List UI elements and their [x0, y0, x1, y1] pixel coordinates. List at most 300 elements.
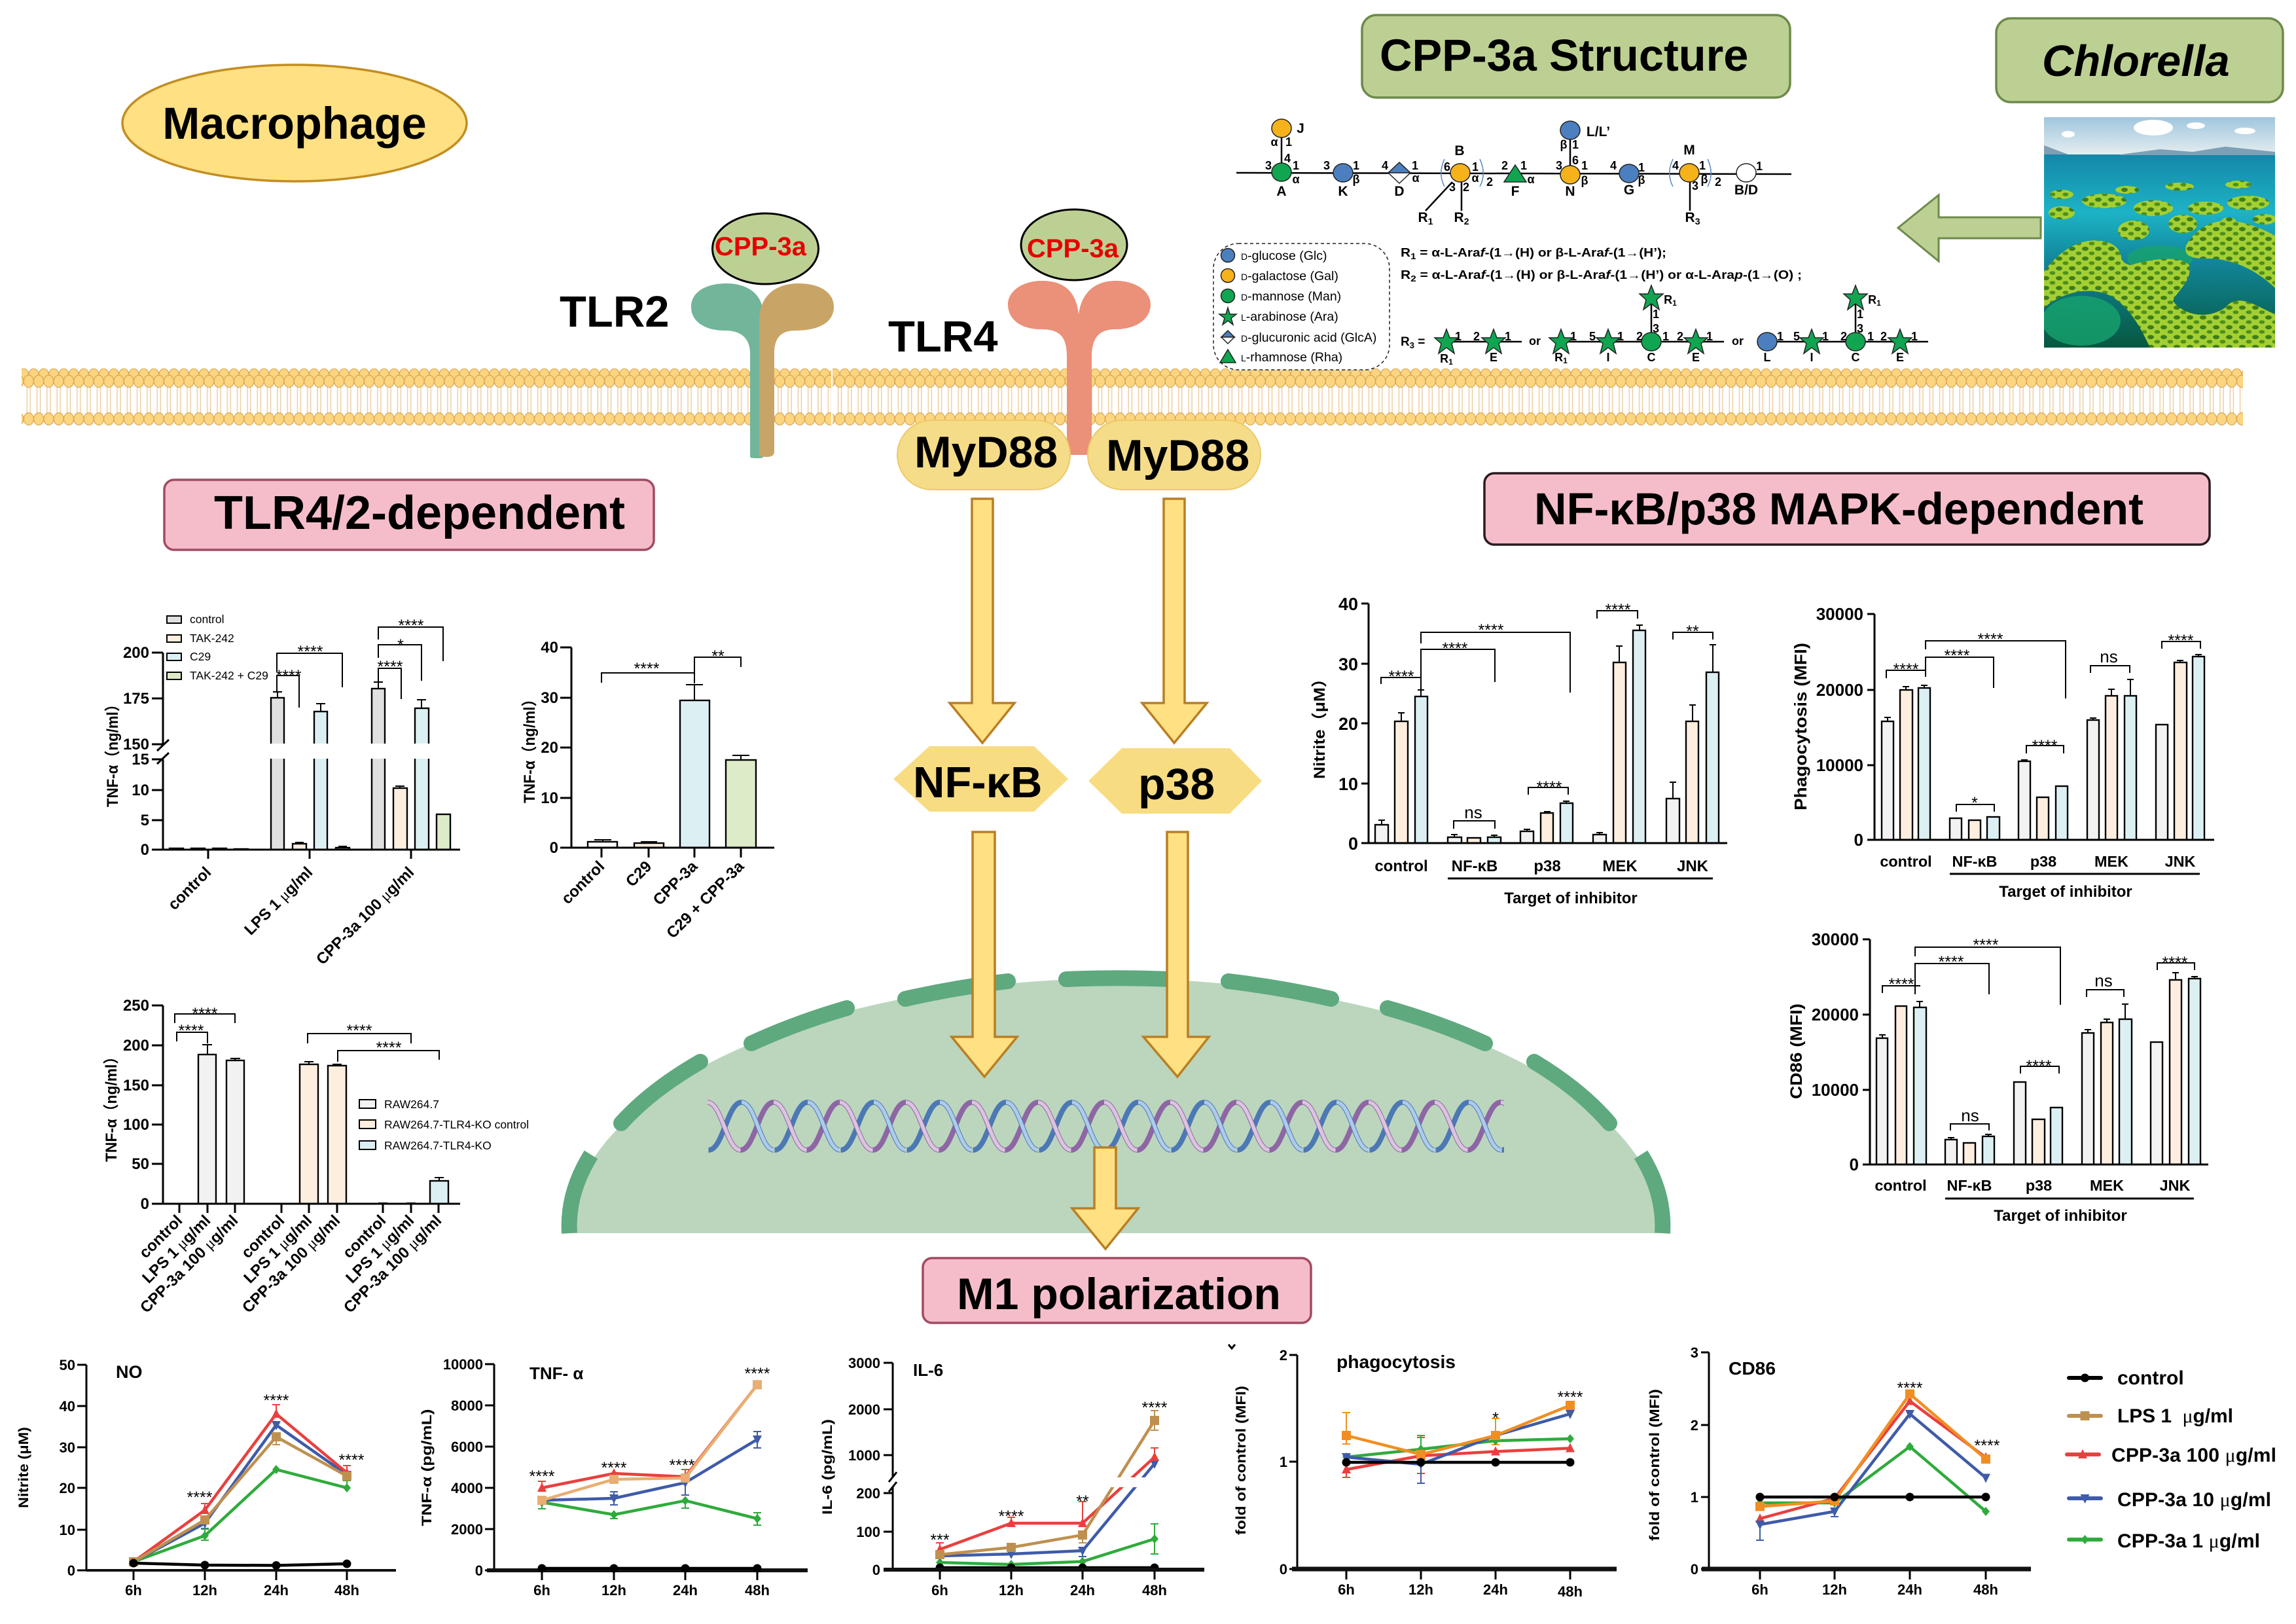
line chart: phagocytosis: [1229, 1344, 1617, 1600]
glycan backbone structure: 4: [1672, 159, 1679, 172]
line chart: IL-6: 100: [856, 1524, 880, 1540]
bar chart: Nitrite inhibitors: [1311, 594, 1727, 907]
bar chart: TLR4 knockout: 100: [123, 1116, 149, 1134]
line chart: NO: 24h: [264, 1582, 289, 1598]
R3 definition chains: R: [1664, 293, 1672, 306]
glycan backbone structure: A: [1276, 184, 1287, 199]
significance brackets: ****: [2032, 737, 2058, 755]
line chart: IL-6: ***: [930, 1531, 950, 1549]
arrow: MyD88 to p38: [1142, 499, 1207, 743]
glycan backbone structure: 3: [1556, 159, 1562, 172]
R3 definition chains: 1: [1653, 308, 1659, 321]
significance brackets: ****: [378, 658, 403, 676]
bar chart: CD86 inhibitors: CD86 (MFI): [1787, 1003, 1806, 1099]
R3 definition chains: E: [1896, 351, 1904, 364]
significance brackets: ****: [1945, 647, 1970, 665]
legend: [167, 613, 268, 682]
line chart: CD86: 0: [1691, 1561, 1698, 1578]
R2 definition: = α-L-Ara: [1416, 268, 1482, 281]
R3 definition chains: 1: [1617, 330, 1624, 343]
bar chart: TNF-a C29: C29: [622, 857, 655, 890]
bar chart: TNF-a with inhibitors: 175: [123, 690, 149, 708]
line chart: IL-6: **: [1076, 1492, 1089, 1511]
line chart: NO: Nitrite (μM): [16, 1427, 31, 1508]
glycan backbone structure: 4: [1382, 159, 1388, 172]
bar chart: TLR4 knockout: 250: [123, 997, 149, 1015]
line chart: NO: ****: [264, 1392, 289, 1410]
legend: TAK-242: [190, 632, 234, 645]
R3 definition chains: 2: [1677, 330, 1683, 343]
line chart: CD86: 48h: [1973, 1581, 1998, 1598]
bar chart: Nitrite inhibitors: Nitrite（μM）: [1311, 670, 1329, 779]
line chart: TNF-a: 12h: [601, 1582, 626, 1598]
MyD88 left: [897, 420, 1070, 490]
bar chart: TNF-a with inhibitors: 15: [132, 751, 149, 768]
legend: monosaccharides: D-glucose (Glc): [1241, 249, 1327, 263]
glycan backbone structure: 1: [1428, 216, 1433, 226]
R3 definition chains: or: [1529, 334, 1541, 348]
R3 definition chains: 2: [1840, 330, 1847, 343]
significance brackets: ****: [634, 660, 660, 678]
glycan backbone structure: 3: [1323, 159, 1330, 172]
significance brackets: ****: [1389, 668, 1414, 686]
significance brackets: ns: [2100, 647, 2118, 666]
p38 hexagon: [1088, 748, 1262, 814]
line chart: phagocytosis: fold of control (MFI): [1234, 1386, 1249, 1535]
bar chart: TNF-a C29: C29 + CPP-3a: [663, 857, 748, 942]
bar chart: TLR4 knockout: 150: [123, 1077, 149, 1094]
bar chart: CD86 inhibitors: 20000: [1812, 1005, 1859, 1024]
glycan backbone structure: [1236, 119, 1791, 226]
bar chart: Phagocytosis inhibitors: Target of inhibitor: [1999, 883, 2132, 901]
line chart: CD86: ****: [1975, 1437, 2000, 1455]
line chart: IL-6: ****: [999, 1507, 1024, 1526]
significance brackets: [1381, 601, 1713, 829]
membrane: [22, 369, 2243, 425]
glycan backbone structure: N: [1565, 184, 1575, 199]
line chart: TNF-a: ****: [745, 1365, 770, 1383]
line chart: NO: 12h: [192, 1582, 217, 1598]
glycan backbone structure: 6: [1572, 154, 1579, 167]
bar chart: TLR4 knockout: 50: [132, 1155, 149, 1173]
line chart: NO: 20: [60, 1480, 75, 1496]
glycan backbone structure: B: [1454, 143, 1465, 158]
legend: time-course series: [2067, 1367, 2276, 1552]
legend: monosaccharides: D-galactose (Gal): [1241, 269, 1338, 283]
NF-kB hexagon: NF-κB: [913, 758, 1042, 807]
glycan backbone structure: 1: [1638, 161, 1645, 174]
line chart: phagocytosis: 6h: [1338, 1581, 1355, 1598]
heading: TLR4/2-dependent: TLR4/2-dependent: [214, 487, 625, 539]
glycan backbone structure: 1: [1572, 138, 1579, 151]
glycan backbone structure: α: [1527, 173, 1535, 186]
R3 definition chains: I: [1606, 351, 1610, 364]
bar chart: Phagocytosis inhibitors: 10000: [1816, 755, 1863, 775]
line chart: NO: NO: [116, 1362, 143, 1382]
bar chart: TNF-a C29: [521, 639, 774, 942]
bar chart: TNF-a C29: 20: [541, 739, 558, 757]
bar chart: TNF-a C29: control: [558, 857, 608, 908]
glycan backbone structure: 2: [1486, 175, 1493, 189]
R2 definition: 2: [1410, 274, 1416, 283]
bars: [170, 689, 450, 850]
significance brackets: ****: [1939, 953, 1964, 971]
bar chart: TNF-a with inhibitors: 200: [123, 644, 149, 662]
bar chart: Phagocytosis inhibitors: MEK: [2094, 853, 2128, 870]
bar chart: TLR4 knockout: [103, 997, 529, 1316]
glycan backbone structure: R: [1418, 210, 1428, 225]
R3 definition chains: [1401, 285, 1928, 367]
significance brackets: ****: [376, 1039, 402, 1057]
line chart: TNF-a: TNF-α (pg/mL): [420, 1409, 435, 1526]
bar chart: TLR4 knockout: control: [238, 1212, 288, 1262]
glycan backbone structure: 4: [1284, 152, 1291, 165]
DNA helix: [708, 1100, 1504, 1153]
heading: TLR4/2-dependent: [164, 480, 654, 550]
bar chart: TNF-a C29: 40: [541, 639, 558, 657]
bar chart: TNF-a with inhibitors: 0: [141, 841, 149, 859]
line chart: phagocytosis: 48h: [1558, 1583, 1583, 1600]
significance brackets: [1882, 936, 2195, 1130]
significance brackets: ****: [192, 1005, 218, 1023]
glycan backbone structure: 3: [1692, 179, 1698, 192]
bar chart: Phagocytosis inhibitors: p38: [2030, 853, 2056, 870]
bar chart: TLR4 knockout: CPP-3a 100 μg/ml: [137, 1212, 242, 1316]
significance brackets: [276, 617, 443, 708]
glycan backbone structure: 2: [1463, 181, 1469, 194]
bar chart: Nitrite inhibitors: 30: [1338, 655, 1358, 674]
glycan backbone structure: R: [1685, 210, 1695, 225]
significance brackets: ****: [1893, 660, 1919, 679]
line chart: CD86: 12h: [1822, 1581, 1847, 1598]
bar chart: TLR4 knockout: LPS 1 μg/ml: [139, 1212, 214, 1287]
line chart: phagocytosis: 2: [1280, 1347, 1287, 1363]
line chart: CD86: 1: [1691, 1489, 1698, 1506]
line chart: IL-6: 0: [872, 1562, 880, 1578]
R1 definition: R: [1401, 246, 1409, 259]
R3 definition chains: I: [1810, 351, 1814, 364]
significance brackets: [175, 1005, 439, 1062]
TLR4 label: TLR4: [888, 312, 997, 361]
line chart: CD86: 3: [1691, 1344, 1698, 1361]
significance brackets: ****: [179, 1022, 204, 1040]
glycan backbone structure: 1: [1520, 159, 1527, 172]
glycan backbone structure: β: [1581, 174, 1588, 187]
R3 definition chains: 1: [1822, 330, 1829, 343]
bar chart: TLR4 knockout: TNF-α（ng/ml）: [103, 1049, 120, 1162]
line chart: NO: 10: [60, 1522, 75, 1538]
line chart: IL-6: ****: [1142, 1399, 1168, 1417]
glycan backbone structure: 1: [1756, 160, 1763, 173]
significance brackets: **: [1686, 623, 1699, 641]
bar chart: TLR4 knockout: CPP-3a 100 μg/ml: [239, 1212, 344, 1316]
R3 definition chains: 3: [1857, 322, 1863, 335]
line chart: NO: 30: [60, 1439, 75, 1456]
R3 definition chains: 2: [1473, 330, 1480, 343]
bar chart: Nitrite inhibitors: 40: [1338, 594, 1358, 614]
line chart: IL-6: IL-6 (pg/mL): [820, 1419, 835, 1515]
heading: NF-kB/p38 MAPK-dependent: NF-κB/p38 MAPK-dependent: [1534, 484, 2144, 534]
bar chart: TNF-a with inhibitors: 10: [132, 782, 149, 799]
bar chart: Phagocytosis inhibitors: Phagocytosis (MFI): [1791, 643, 1810, 810]
Macrophage label: [122, 65, 467, 181]
legend: [359, 1098, 529, 1152]
bar chart: TNF-a with inhibitors: 5: [141, 812, 149, 829]
R3 definition chains: C: [1647, 351, 1656, 364]
line chart: TNF-a: 10000: [443, 1356, 483, 1373]
bar chart: TNF-a with inhibitors: 150: [123, 736, 149, 753]
bar chart: CD86 inhibitors: Target of inhibitor: [1994, 1207, 2127, 1225]
line chart: IL-6: IL-6: [913, 1360, 943, 1380]
R3 definition chains: 1: [1563, 356, 1568, 365]
line chart: NO: [16, 1357, 396, 1598]
nucleus: [569, 978, 1662, 1233]
glycan backbone structure: 1: [1699, 159, 1706, 172]
bar chart: CD86 inhibitors: MEK: [2090, 1177, 2124, 1194]
line chart: TNF-a: 4000: [451, 1480, 483, 1496]
line chart: CD86: 2: [1691, 1417, 1698, 1434]
bar chart: CD86 inhibitors: NF-κB: [1947, 1177, 1992, 1194]
line chart: CD86: 24h: [1897, 1581, 1922, 1598]
R3 definition chains: 5: [1589, 330, 1596, 343]
R3 definition chains: 1: [1777, 330, 1784, 343]
receptor: TLR2: [691, 283, 834, 458]
bar chart: CD86 inhibitors: 10000: [1812, 1080, 1859, 1100]
bar chart: CD86 inhibitors: [1787, 929, 2208, 1225]
bar chart: TNF-a C29: 0: [550, 839, 558, 857]
MyD88 right: [1088, 420, 1261, 490]
glycan backbone structure: B/D: [1734, 183, 1758, 198]
significance brackets: ****: [1443, 640, 1468, 658]
significance brackets: ****: [399, 617, 424, 635]
glycan backbone structure: F: [1511, 184, 1520, 199]
line chart: IL-6: 3000: [848, 1355, 880, 1371]
significance brackets: **: [711, 647, 725, 666]
glycan backbone structure: β: [1352, 173, 1360, 186]
significance brackets: ****: [276, 667, 302, 685]
R2 definition: R: [1401, 268, 1409, 281]
R3 definition chains: E: [1692, 351, 1700, 364]
significance brackets: ****: [2168, 632, 2194, 650]
bar chart: TNF-a with inhibitors: LPS 1 μg/ml: [241, 863, 316, 939]
bar chart: Nitrite inhibitors: NF-κB: [1452, 857, 1498, 875]
glycan backbone structure: 1: [1581, 159, 1588, 172]
line chart: phagocytosis: ****: [1558, 1388, 1583, 1407]
arrow: DNA to M1 polarization: [1072, 1147, 1138, 1249]
bar chart: TLR4 knockout: LPS 1 μg/ml: [240, 1212, 315, 1287]
line chart: TNF-a: 6h: [533, 1582, 550, 1598]
R3 definition chains: 1: [1455, 330, 1462, 343]
MyD88 left: MyD88: [914, 427, 1058, 477]
R3 definition chains: 2: [1636, 330, 1643, 343]
line chart: TNF-a: 2000: [451, 1521, 483, 1538]
R3 definition chains: R: [1440, 352, 1448, 365]
line chart: NO: 0: [67, 1562, 75, 1579]
line chart: phagocytosis: 0: [1280, 1561, 1287, 1578]
bar chart: TLR4 knockout: CPP-3a 100 μg/ml: [340, 1212, 445, 1316]
line chart: phagocytosis: *: [1492, 1409, 1499, 1428]
glycan backbone structure: 3: [1449, 181, 1456, 194]
line chart: TNF-a: 24h: [673, 1582, 698, 1598]
line chart: IL-6: 12h: [999, 1582, 1024, 1598]
line chart: TNF-a: ****: [601, 1459, 627, 1477]
line chart: NO: ****: [187, 1489, 213, 1507]
line chart: TNF-a: 0: [475, 1562, 483, 1579]
R3 definition chains: R: [1401, 335, 1410, 349]
bar chart: TNF-a C29: TNF-α（ng/ml）: [521, 692, 539, 803]
significance brackets: *: [397, 636, 404, 655]
bar chart: TLR4 knockout: LPS 1 μg/ml: [342, 1212, 418, 1287]
TLR2 label: TLR2: [560, 287, 669, 336]
bar chart: TNF-a C29: 10: [541, 789, 558, 807]
arrow: NF-kB to nucleus: [952, 832, 1017, 1077]
significance brackets: ****: [2026, 1057, 2052, 1075]
glycan backbone structure: α: [1292, 173, 1300, 186]
bar chart: Phagocytosis inhibitors: [1791, 604, 2214, 901]
bar chart: CD86 inhibitors: JNK: [2160, 1177, 2191, 1194]
line chart: TNF-a: ****: [670, 1456, 695, 1475]
R3 definition chains: 3: [1410, 340, 1414, 350]
line chart: TNF-a: [420, 1356, 808, 1598]
bar chart: TNF-a with inhibitors: TNF-α（ng/ml）: [104, 697, 122, 807]
ligand: CPP-3a on TLR2: [712, 213, 818, 284]
bar chart: TNF-a with inhibitors: control: [165, 863, 215, 914]
legend: time-course series: control: [2117, 1367, 2184, 1389]
line chart: TNF-a: TNF- α: [529, 1363, 583, 1383]
line chart: NO: 48h: [334, 1582, 359, 1598]
line chart: TNF-a: 48h: [745, 1582, 770, 1598]
R3 definition chains: 1: [1706, 330, 1713, 343]
R2 definition: f-(1→(H) or β-L-Ara f-(1→(H’) or α-L-Ara p-(1→(O) ;: [1481, 268, 1793, 281]
glycan backbone structure: α: [1412, 171, 1420, 185]
glycan backbone structure: 1: [1353, 159, 1359, 172]
glycan backbone structure: M: [1683, 143, 1695, 158]
R3 definition chains: 1: [1662, 330, 1669, 343]
significance brackets: ns: [1464, 803, 1482, 822]
bar chart: Phagocytosis inhibitors: 20000: [1816, 680, 1863, 700]
R3 definition chains: 3: [1653, 322, 1659, 335]
glycan backbone structure: 2: [1501, 159, 1508, 172]
bar chart: TNF-a with inhibitors: CPP-3a 100 μg/ml: [313, 863, 418, 968]
R3 definition chains: 1: [1867, 330, 1874, 343]
line chart: CD86: CD86: [1729, 1358, 1776, 1379]
bar chart: Nitrite inhibitors: MEK: [1602, 857, 1638, 875]
NF-kB hexagon: [893, 746, 1068, 812]
R3 definition chains: 1: [1857, 308, 1863, 321]
heading: CPP-3a Structure: [1362, 15, 1790, 98]
arrow: p38 to nucleus: [1143, 832, 1209, 1077]
bar chart: Nitrite inhibitors: p38: [1534, 857, 1561, 875]
line chart: IL-6: [820, 1355, 1208, 1598]
R3 definition chains: 5: [1793, 330, 1800, 343]
legend: TAK-242 + C29: [190, 669, 268, 682]
bar chart: TNF-a C29: CPP-3a: [650, 857, 702, 909]
bar chart: Nitrite inhibitors: control: [1374, 857, 1428, 875]
heading: Chlorella: [1996, 18, 2283, 102]
R3 definition chains: 1: [1505, 330, 1511, 343]
glycan backbone structure: 1: [1293, 159, 1299, 172]
glycan backbone structure: β: [1638, 173, 1645, 187]
R1 definition: f-(1→(H) or β-L-Ara f-(1→(H’);: [1480, 246, 1659, 259]
R3 definition chains: 1: [1911, 330, 1918, 343]
line chart: NO: 40: [60, 1398, 75, 1415]
line chart: CD86: fold of control (MFI): [1647, 1389, 1662, 1541]
glycan backbone structure: α: [1471, 171, 1479, 185]
bar chart: CD86 inhibitors: 0: [1850, 1155, 1859, 1174]
bar chart: Phagocytosis inhibitors: NF-κB: [1952, 853, 1997, 870]
R3 definition chains: R: [1868, 293, 1876, 306]
significance brackets: ns: [2094, 971, 2113, 990]
line chart: NO: 6h: [125, 1582, 142, 1598]
line chart: IL-6: 200: [856, 1485, 880, 1502]
glycan backbone structure: 1: [1412, 159, 1418, 172]
line chart: IL-6: 48h: [1142, 1582, 1167, 1598]
heading: NF-kB/p38 MAPK-dependent: [1484, 473, 2210, 545]
significance brackets: *: [1971, 794, 1978, 812]
glycan backbone structure: β: [1560, 138, 1567, 151]
significance brackets: ****: [347, 1022, 372, 1040]
Macrophage label: Macrophage: [162, 98, 427, 149]
heading: Chlorella: Chlorella: [2042, 37, 2230, 86]
legend: RAW264.7: [384, 1098, 439, 1111]
glycan backbone structure: 1: [1285, 135, 1292, 149]
bar chart: Phagocytosis inhibitors: JNK: [2165, 853, 2196, 870]
line chart: phagocytosis: 1: [1280, 1454, 1287, 1470]
bar chart: TNF-a with inhibitors: [104, 613, 460, 968]
line chart: TNF-a: 6000: [451, 1439, 483, 1455]
significance brackets: [1886, 630, 2200, 812]
arrow: MyD88 to NF-kB: [950, 499, 1014, 743]
line chart: phagocytosis: phagocytosis: [1336, 1352, 1456, 1372]
legend: C29: [190, 650, 211, 663]
significance brackets: ****: [298, 643, 323, 661]
legend: time-course series: CPP-3a 1 μg/ml: [2117, 1530, 2260, 1552]
line chart: phagocytosis: 12h: [1408, 1581, 1433, 1598]
significance brackets: [601, 647, 741, 683]
bar chart: Phagocytosis inhibitors: 0: [1854, 830, 1863, 850]
legend: RAW264.7-TLR4-KO: [384, 1139, 492, 1152]
glycan backbone structure: 1: [1472, 160, 1479, 173]
glycan backbone structure: 2: [1715, 175, 1721, 189]
bar chart: CD86 inhibitors: 30000: [1812, 929, 1859, 949]
line chart: CD86: ****: [1897, 1379, 1923, 1398]
bar chart: Nitrite inhibitors: JNK: [1677, 857, 1709, 875]
R3 definition chains: C: [1851, 351, 1860, 364]
bar chart: TNF-a C29: 30: [541, 689, 558, 707]
bar chart: Nitrite inhibitors: 10: [1338, 774, 1358, 794]
bar chart: Nitrite inhibitors: 20: [1338, 714, 1358, 734]
bar chart: CD86 inhibitors: control: [1874, 1177, 1927, 1194]
ligand: CPP-3a on TLR4: [1021, 209, 1127, 280]
line chart: IL-6: 2000: [848, 1401, 880, 1418]
bar chart: Nitrite inhibitors: 0: [1348, 834, 1358, 854]
glycan backbone structure: 4: [1610, 159, 1617, 172]
glycan backbone structure: D: [1394, 184, 1405, 199]
line chart: TNF-a: ****: [529, 1468, 555, 1486]
glycan backbone structure: J: [1297, 121, 1304, 136]
legend: time-course series: LPS 1 μg/ml: [2117, 1405, 2233, 1427]
significance brackets: ****: [1479, 621, 1504, 640]
significance brackets: ****: [1537, 778, 1562, 797]
glycan backbone structure: L/L’: [1587, 124, 1610, 139]
R3 definition chains: or: [1732, 334, 1744, 348]
significance brackets: ****: [1605, 601, 1631, 619]
significance brackets: ****: [1889, 975, 1914, 994]
R3 definition chains: 2: [1880, 330, 1887, 343]
legend: monosaccharides: D-glucuronic acid (GlcA): [1241, 331, 1376, 345]
bar chart: TLR4 knockout: 200: [123, 1037, 149, 1055]
R3 definition chains: R: [1554, 351, 1563, 364]
